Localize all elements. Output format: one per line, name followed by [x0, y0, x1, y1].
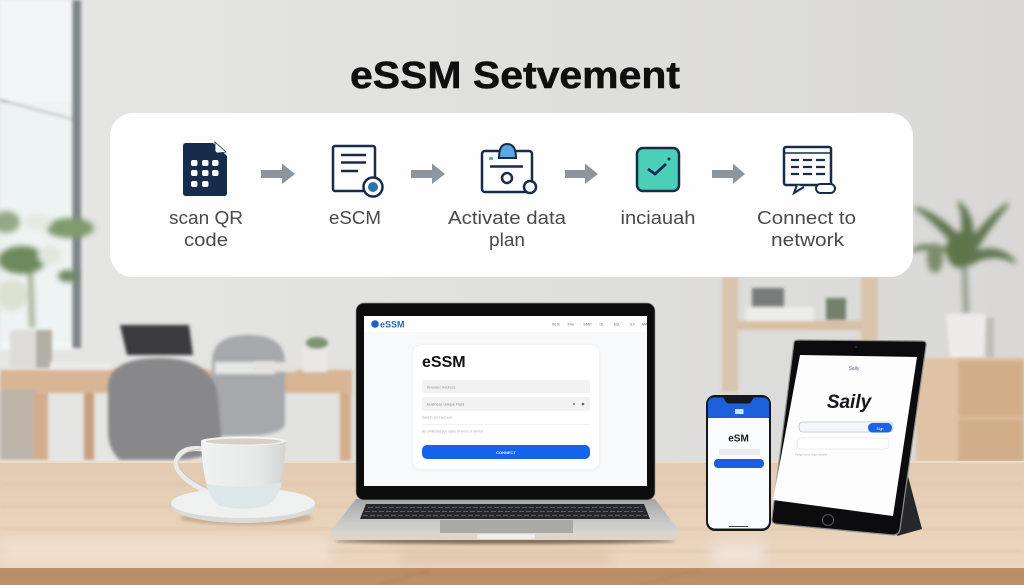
blurred plant pot on the left	[10, 330, 52, 368]
blurred small plant on background desk	[254, 337, 328, 372]
title: eSSM Setvement	[350, 55, 680, 97]
login dialog: By continuing you agree to terms of service	[422, 430, 483, 434]
arrow 2	[411, 164, 445, 184]
screen header logo: eSSM	[380, 320, 405, 330]
window on the left	[0, 0, 81, 350]
screen header nav: Item File SMP ID EQ UX AM	[552, 322, 647, 326]
step 3: Activate data plan	[448, 144, 567, 250]
login dialog: Browser Address	[427, 386, 456, 390]
blurred wooden cabinet	[916, 358, 1024, 462]
icon: activation card	[482, 144, 536, 193]
arrow 4	[712, 164, 745, 184]
login dialog: eSSM	[422, 354, 466, 371]
label: Activate data plan: Activate data	[448, 208, 567, 228]
blurred white pot on the right	[946, 314, 994, 358]
blurred monitor and chairs	[108, 325, 285, 460]
login dialog: Business unique Field	[427, 402, 464, 406]
tablet screen	[773, 355, 917, 516]
label: Connect to network: network	[771, 230, 845, 250]
step 1: scan QR code	[169, 142, 243, 250]
arrow 3	[565, 164, 598, 184]
blurred plant on the right	[914, 202, 1015, 314]
phone	[706, 395, 771, 531]
arrow 1	[261, 164, 295, 184]
tablet home button	[822, 514, 834, 526]
step 2: eSCM	[329, 146, 382, 228]
icon: QR document	[183, 142, 227, 196]
tablet screen: Saily	[849, 366, 860, 372]
label: inciauah: inciauah	[620, 208, 696, 228]
tablet stand	[897, 465, 922, 536]
laptop base and keyboard	[330, 499, 680, 540]
blurred plant on the left	[0, 211, 94, 328]
laptop	[330, 303, 680, 544]
step 5: Connect to network	[757, 147, 856, 250]
coffee cup and saucer	[171, 436, 315, 525]
tablet search field: Sign	[876, 427, 884, 431]
icon: network table with speech tail	[784, 147, 835, 193]
icon: teal check	[637, 148, 679, 191]
tablet wordmark: Saily	[827, 392, 873, 413]
label: scan QR code: scan QR	[169, 208, 243, 228]
icon: document with badge	[333, 146, 382, 196]
label: Connect to network: Connect to	[757, 208, 856, 228]
label: Activate data plan: plan	[489, 230, 525, 250]
tablet search field	[799, 422, 893, 432]
label: eSCM: eSCM	[329, 208, 381, 228]
label: scan QR code: code	[184, 230, 228, 250]
panel: steps	[110, 113, 913, 277]
dialog button	[422, 445, 590, 459]
login dialog: Save to your account	[422, 416, 452, 420]
tablet	[772, 340, 926, 536]
blurred desk in the background	[0, 362, 352, 461]
wooden table	[0, 461, 1024, 585]
step 4: inciauah	[620, 148, 696, 228]
tablet screen: Forgot your login details	[795, 452, 828, 456]
login dialog	[413, 345, 599, 470]
laptop screen	[364, 316, 647, 486]
phone screen: eSM	[728, 434, 749, 444]
laptop lid	[356, 303, 655, 500]
login dialog: CONNECT	[496, 450, 516, 455]
phone button	[714, 459, 764, 468]
blurred shelf unit on the right	[722, 277, 878, 392]
